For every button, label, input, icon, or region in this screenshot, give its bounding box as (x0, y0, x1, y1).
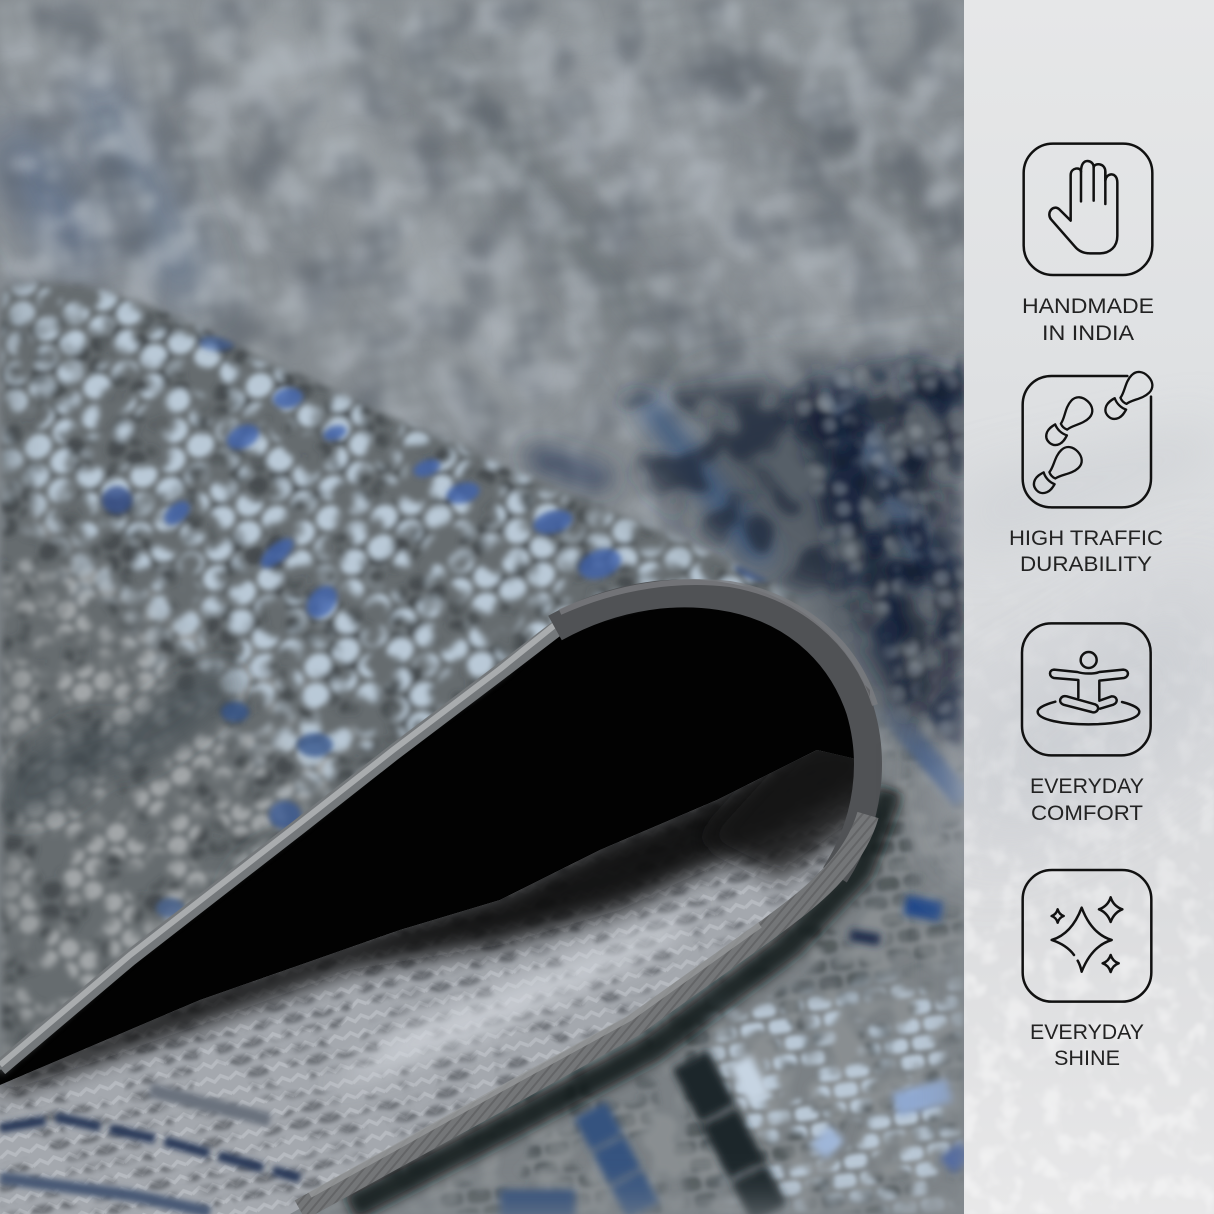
icon: footprints (1023, 368, 1157, 507)
icon: hand (1024, 144, 1152, 275)
label: high traffic durability (1009, 527, 1163, 576)
label: handmade in India: IN INDIA (1042, 322, 1134, 345)
feature: everyday shine (1023, 870, 1151, 1070)
blurred rug background (0, 0, 964, 1214)
edge: left run (0, 626, 560, 1068)
icon: sparkles (1023, 870, 1151, 1002)
underside knit (0, 750, 854, 1214)
label: high traffic durability: DURABILITY (1020, 553, 1152, 576)
panel: feature column (964, 0, 1214, 1214)
bright lit patch near band (330, 900, 700, 1090)
black hollow under the flap (0, 590, 870, 1110)
label: everyday shine: SHINE (1054, 1047, 1120, 1070)
blue stitches (102, 335, 771, 918)
panel mottling (964, 0, 1214, 1214)
edge: lower run (300, 815, 868, 1210)
label: everyday shine: EVERYDAY (1030, 1021, 1144, 1044)
lower rug surface (339, 717, 964, 1214)
label: everyday comfort: COMFORT (1031, 802, 1143, 825)
feature: everyday comfort (1022, 623, 1151, 825)
dark blue right band (700, 360, 964, 790)
darker wool patches (2, 662, 268, 867)
photo: rolled rug close-up (0, 0, 964, 1214)
blue and dark wool stripes (500, 700, 964, 1214)
feature: high traffic durability (1009, 368, 1163, 576)
label: handmade in India: HANDMADE (1022, 295, 1154, 318)
flap top knit surface (0, 280, 795, 1076)
edge: curl top and right (555, 593, 868, 875)
icon: meditating figure (1022, 623, 1151, 755)
dark blue underside stripes (0, 1090, 300, 1212)
label: everyday shine (1030, 1021, 1144, 1070)
label: everyday comfort (1030, 775, 1144, 825)
dark shade toward hollow (0, 740, 880, 1095)
label: handmade in India (1022, 295, 1154, 345)
label: high traffic durability: HIGH TRAFFIC (1009, 527, 1163, 550)
bound rug edge (0, 582, 875, 1210)
label: everyday comfort: EVERYDAY (1030, 775, 1144, 798)
shadow under flap (350, 790, 890, 1208)
feature: handmade in India (1022, 144, 1154, 345)
